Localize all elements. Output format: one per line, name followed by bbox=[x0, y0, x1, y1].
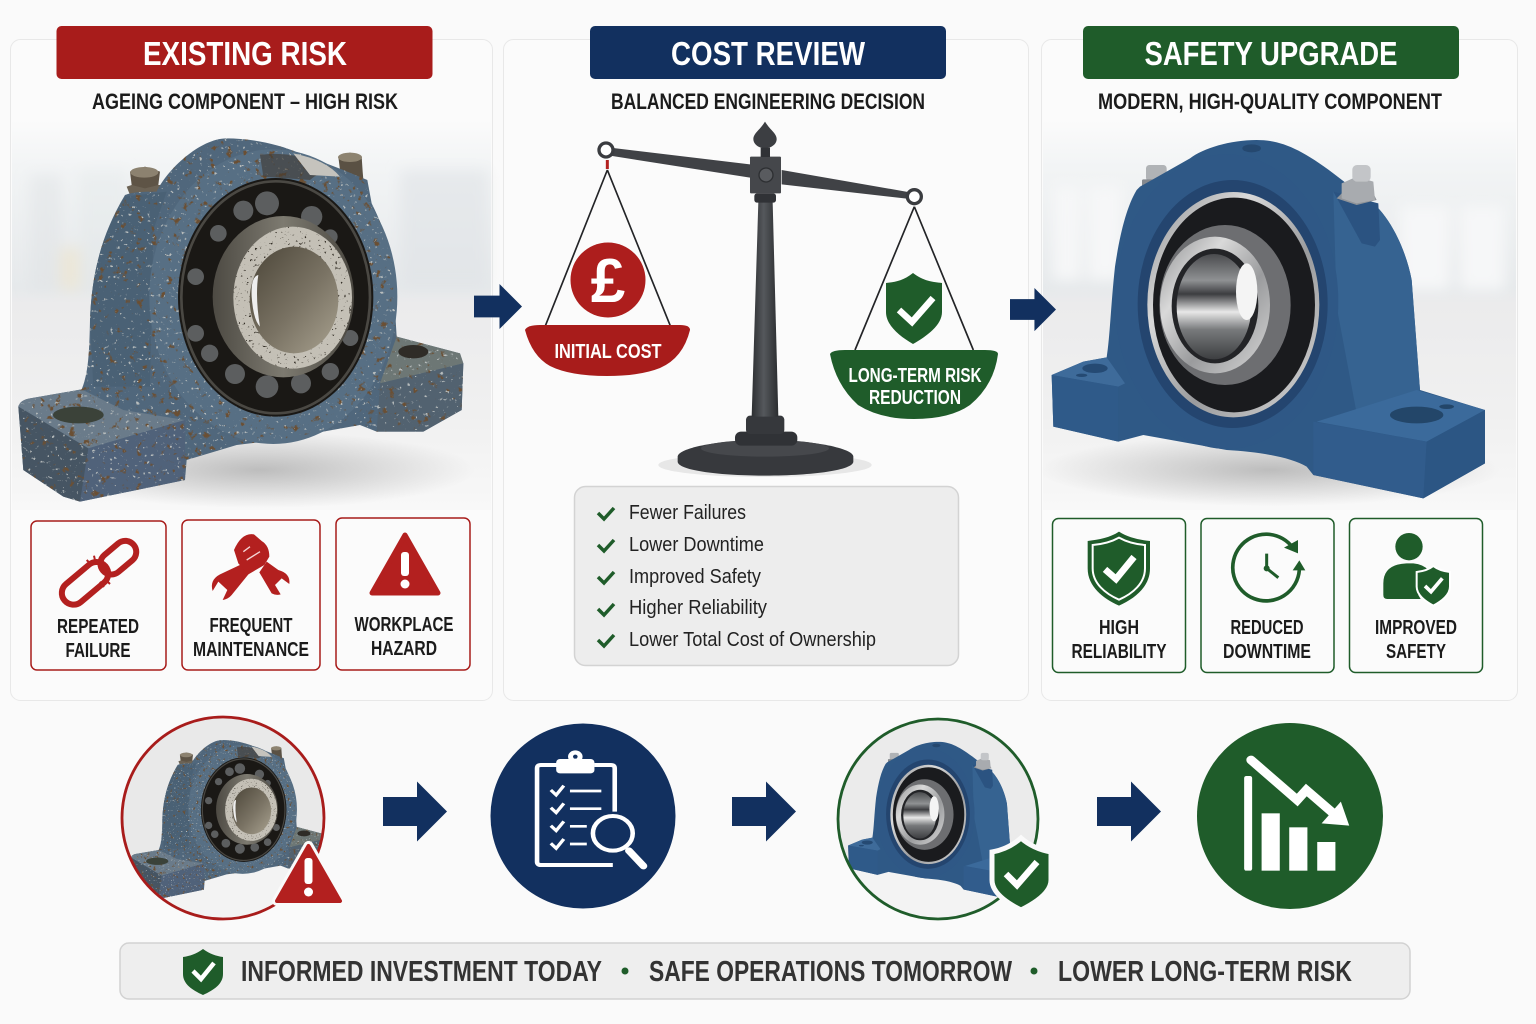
benefits checklist: Lower Downtime bbox=[629, 534, 764, 556]
icon: balance scale bbox=[525, 122, 998, 477]
image: rusted pillow block bearing bbox=[18, 138, 475, 508]
subheading: ageing component: AGEING COMPONENT – HIGH RISK bbox=[92, 89, 398, 114]
panel: existing risk bbox=[10, 26, 492, 700]
card: repeated failure: REPEATED bbox=[57, 616, 139, 638]
footer banner: SAFE OPERATIONS TOMORROW bbox=[649, 956, 1012, 988]
card: reduced downtime bbox=[1201, 518, 1334, 672]
icon: shield check bbox=[1088, 532, 1150, 606]
benefits checklist: Lower Total Cost of Ownership bbox=[629, 629, 876, 651]
card: repeated failure: FAILURE bbox=[66, 640, 130, 662]
panel: safety upgrade bbox=[1040, 26, 1518, 700]
card: high reliability: HIGH bbox=[1099, 617, 1139, 639]
arrow: risk to cost bbox=[474, 284, 522, 329]
icon: warning badge bbox=[277, 846, 340, 901]
heading: existing risk bbox=[56, 26, 432, 79]
footer banner: LOWER LONG-TERM RISK bbox=[1058, 956, 1352, 988]
card: improved safety: IMPROVED bbox=[1375, 617, 1457, 639]
image: new blue pillow block bearing bbox=[1040, 140, 1500, 506]
process step: old bearing with warning bbox=[120, 717, 340, 920]
card: workplace hazard: WORKPLACE bbox=[354, 614, 454, 636]
heading: safety upgrade bbox=[1083, 26, 1459, 79]
scale pan: long-term risk reduction: LONG-TERM RISK bbox=[848, 365, 982, 387]
icon: pound coin: £ bbox=[591, 247, 625, 316]
benefits checklist: Improved Safety bbox=[629, 566, 761, 588]
icon: green shield bbox=[886, 273, 942, 344]
icon: clock with arrows bbox=[1233, 534, 1305, 601]
card: frequent maintenance: FREQUENT bbox=[210, 615, 292, 637]
process step: new bearing with shield bbox=[838, 719, 1051, 920]
panel: cost review bbox=[504, 26, 1028, 700]
subheading: modern component: MODERN, HIGH-QUALITY COMPONENT bbox=[1098, 89, 1442, 114]
heading: existing risk: EXISTING RISK bbox=[143, 35, 347, 72]
arrow: step 3 to 4 bbox=[1097, 782, 1161, 842]
process step: falling risk chart bbox=[1197, 723, 1383, 909]
scale pan: initial cost: INITIAL COST bbox=[554, 341, 662, 363]
card: reduced downtime: DOWNTIME bbox=[1223, 641, 1311, 663]
arrow: cost to safety bbox=[1010, 288, 1056, 331]
subheading: balanced engineering decision: BALANCED ENGINEERING DECISION bbox=[611, 89, 925, 114]
arrow: step 2 to 3 bbox=[732, 782, 796, 842]
icon: person with shield bbox=[1383, 533, 1450, 606]
icon: footer shield bbox=[183, 949, 223, 995]
icon: pound coin bbox=[570, 242, 646, 318]
heading: cost review: COST REVIEW bbox=[671, 35, 866, 72]
benefits checklist: Fewer Failures bbox=[629, 502, 746, 524]
benefits checklist bbox=[574, 486, 958, 666]
card: high reliability: RELIABILITY bbox=[1072, 641, 1167, 663]
card: frequent maintenance bbox=[182, 520, 320, 670]
icon: broken chain bbox=[57, 536, 141, 609]
scale pan: long-term risk reduction bbox=[830, 350, 998, 419]
card: high reliability bbox=[1052, 518, 1186, 672]
icon: shield badge bbox=[992, 838, 1051, 910]
arrow: step 1 to 2 bbox=[383, 782, 447, 842]
process step: inspection checklist bbox=[490, 724, 676, 908]
heading: cost review bbox=[590, 26, 946, 79]
card: repeated failure bbox=[31, 521, 166, 670]
icon: warning triangle bbox=[372, 535, 438, 593]
card: workplace hazard: HAZARD bbox=[371, 638, 437, 660]
scale pan: long-term risk reduction: REDUCTION bbox=[869, 387, 961, 409]
footer banner: INFORMED INVESTMENT TODAY bbox=[241, 956, 602, 988]
card: workplace hazard bbox=[336, 518, 470, 670]
card: reduced downtime: REDUCED bbox=[1230, 617, 1304, 639]
card: improved safety bbox=[1350, 518, 1482, 672]
card: frequent maintenance: MAINTENANCE bbox=[193, 639, 309, 661]
heading: safety upgrade: SAFETY UPGRADE bbox=[1144, 35, 1398, 72]
card: improved safety: SAFETY bbox=[1386, 641, 1446, 663]
icon: wrench and fist bbox=[212, 534, 289, 600]
footer banner bbox=[120, 943, 1410, 999]
benefits checklist: Higher Reliability bbox=[629, 597, 767, 619]
scale pan: initial cost bbox=[525, 325, 690, 376]
